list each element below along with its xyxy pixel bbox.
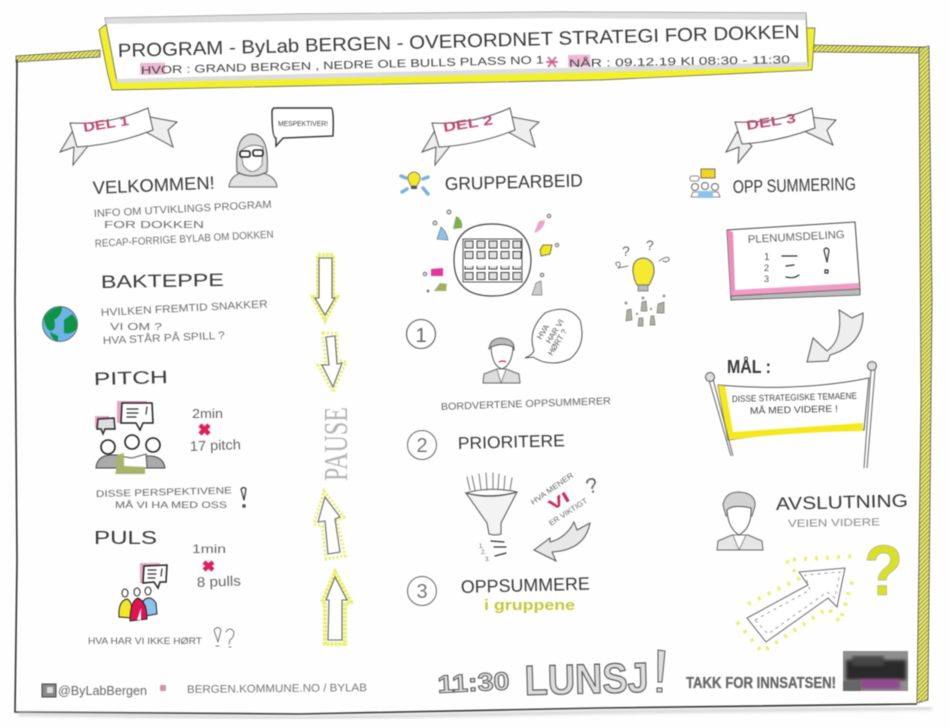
- card: plenumsdeling: PLENUMSDELING: [748, 229, 845, 246]
- card: plenumsdeling: 1: [764, 252, 770, 263]
- heading: bakteppe: [101, 270, 268, 347]
- presenter with speech bubble: MESPEKTIVER!: [278, 121, 328, 128]
- velkommen details: INFO OM UTVIKLINGS PROGRAM: [94, 199, 272, 220]
- banner: goal: MÅ MED VIDERE !: [750, 404, 838, 417]
- bakteppe details: HVILKEN FREMTID SNAKKER: [101, 298, 268, 319]
- where and when: NÅR : 09.12.19 Kl 08:30 - 11:30: [569, 53, 790, 70]
- footer links: BERGEN.KOMMUNE.NO / BYLAB: [187, 682, 367, 696]
- lunch: [437, 650, 665, 704]
- person: closing: [717, 492, 763, 550]
- icon: funnel: 1.: [479, 544, 484, 550]
- note: hva mener vi er viktigt: ER VIKTIGT: [547, 496, 589, 528]
- board with sticky notes: [423, 210, 559, 296]
- icon: funnel: [466, 473, 517, 563]
- step 1: 1: [415, 325, 427, 347]
- heading: pitch: PITCH: [94, 367, 168, 389]
- card: plenumsdeling: [727, 222, 860, 300]
- icon: globe: [42, 306, 78, 342]
- heading: bakteppe: BAKTEPPE: [101, 270, 224, 292]
- presenter with speech bubble: [229, 108, 333, 187]
- title: PROGRAM - ByLab BERGEN - OVERORDNET STRATEGI FOR DOKKEN: [118, 22, 800, 62]
- icon: puls group: [119, 563, 167, 621]
- note: hva mener vi er viktigt: VI: [546, 489, 573, 514]
- ribbon: del 1: DEL 1: [82, 113, 130, 135]
- step 3: [408, 574, 590, 614]
- ribbon: del 1: [60, 108, 177, 165]
- step 3: 3: [416, 581, 428, 603]
- lunch: LUNSJ: [524, 654, 649, 704]
- pitch note: DISSE PERSPEKTIVENE: [96, 485, 232, 500]
- pause label: PAUSE: [318, 407, 355, 481]
- where and when: [140, 53, 790, 77]
- thanks: TAKK FOR INNSATSEN!: [686, 675, 836, 692]
- host with speech bubble: HØRT ?: [546, 327, 569, 357]
- heading: velkommen: [92, 173, 274, 250]
- ribbon: del 3: [726, 108, 836, 163]
- host with speech bubble: [483, 309, 582, 383]
- arrow: pause 2: [318, 333, 346, 392]
- card: plenumsdeling: 2: [764, 263, 769, 273]
- step 2: [408, 430, 565, 460]
- lunch: 11:30: [437, 667, 510, 699]
- step 2: 2: [416, 435, 428, 457]
- ribbon: del 2: DEL 2: [442, 112, 494, 135]
- note: hva mener vi er viktigt: [529, 470, 601, 528]
- step 1: [406, 320, 436, 348]
- arrow: pause 3: [314, 491, 345, 559]
- arrow: to goal: [807, 310, 863, 362]
- icon: light bulb: ?: [622, 243, 630, 259]
- icon: pitch group: [95, 401, 165, 474]
- subheading: i gruppene: i gruppene: [484, 597, 575, 614]
- card: plenumsdeling: 3: [764, 274, 769, 284]
- bakteppe details: VI OM ?: [110, 321, 162, 333]
- banner: goal: DISSE STRATEGISKE TEMAENE: [732, 391, 857, 404]
- heading: puls: PULS: [94, 528, 157, 548]
- puls time: 8 pulls: [197, 572, 241, 590]
- icon: funnel: 2.: [481, 550, 486, 556]
- host with speech bubble: HAR VI: [544, 318, 566, 345]
- heading: avslutning: [776, 491, 908, 530]
- banner: goal: [706, 362, 876, 468]
- note: hva mener vi er viktigt: HVA MENER: [529, 470, 576, 507]
- footer links: @ByLabBergen: [58, 684, 147, 698]
- heading: oppsummere: OPPSUMMERE: [461, 574, 590, 597]
- arrow: pause 1: [313, 255, 337, 320]
- pitch time: 17 pitch: [190, 436, 241, 454]
- heading: oppsummering: OPP SUMMERING: [733, 174, 856, 197]
- icon: idea: [401, 172, 428, 194]
- puls time: [192, 542, 241, 590]
- icon: light bulb: ?: [646, 237, 654, 253]
- arrow: to funnel list: [534, 522, 590, 561]
- bakteppe details: HVA STÅR PÅ SPILL ?: [103, 329, 225, 347]
- puls time: 1min: [192, 542, 226, 556]
- velkommen details: [94, 199, 274, 250]
- pitch time: [190, 406, 241, 454]
- title banner: [99, 12, 815, 90]
- velkommen details: FOR DOKKEN: [104, 219, 204, 231]
- arrow: pause 4: [322, 572, 351, 644]
- ribbon: del 2: [422, 108, 539, 165]
- photo: [843, 651, 908, 691]
- velkommen details: RECAP-FORRIGE BYLAB OM DOKKEN: [95, 229, 274, 250]
- pitch note: MÅ VI HA MED OSS: [115, 500, 227, 511]
- bakteppe details: [101, 298, 268, 347]
- note: hva mener vi er viktigt: ?: [583, 474, 601, 499]
- icon: summary group: [690, 169, 720, 198]
- icon: light bulb: [616, 237, 669, 326]
- subheading: veien videre: VEIEN VIDERE: [788, 516, 880, 530]
- puls note: [88, 628, 234, 647]
- footer links: [42, 682, 367, 698]
- icon: question mark: ?: [864, 532, 903, 611]
- icon: funnel: 3.: [485, 557, 490, 563]
- pitch note: [96, 485, 246, 511]
- heading: avslutning: AVSLUTNING: [776, 491, 908, 514]
- arrow: onward: [737, 556, 858, 652]
- label: bordvertene oppsummerer: BORDVERTENE OPPSUMMERER: [441, 396, 611, 413]
- heading: prioritere: PRIORITERE: [458, 431, 565, 453]
- ribbon: del 3: DEL 3: [745, 110, 797, 133]
- puls note: HVA HAR VI IKKE HØRT: [88, 636, 203, 646]
- heading: gruppearbeid: GRUPPEARBEID: [445, 170, 583, 194]
- pitch time: 2min: [192, 406, 223, 421]
- host with speech bubble: HVA: [535, 322, 551, 341]
- where and when: HVOR : GRAND BERGEN , NEDRE OLE BULLS PLASS NO 1: [141, 54, 544, 77]
- heading: mål: MÅL :: [727, 357, 771, 377]
- heading: velkommen: VELKOMMEN!: [92, 173, 215, 198]
